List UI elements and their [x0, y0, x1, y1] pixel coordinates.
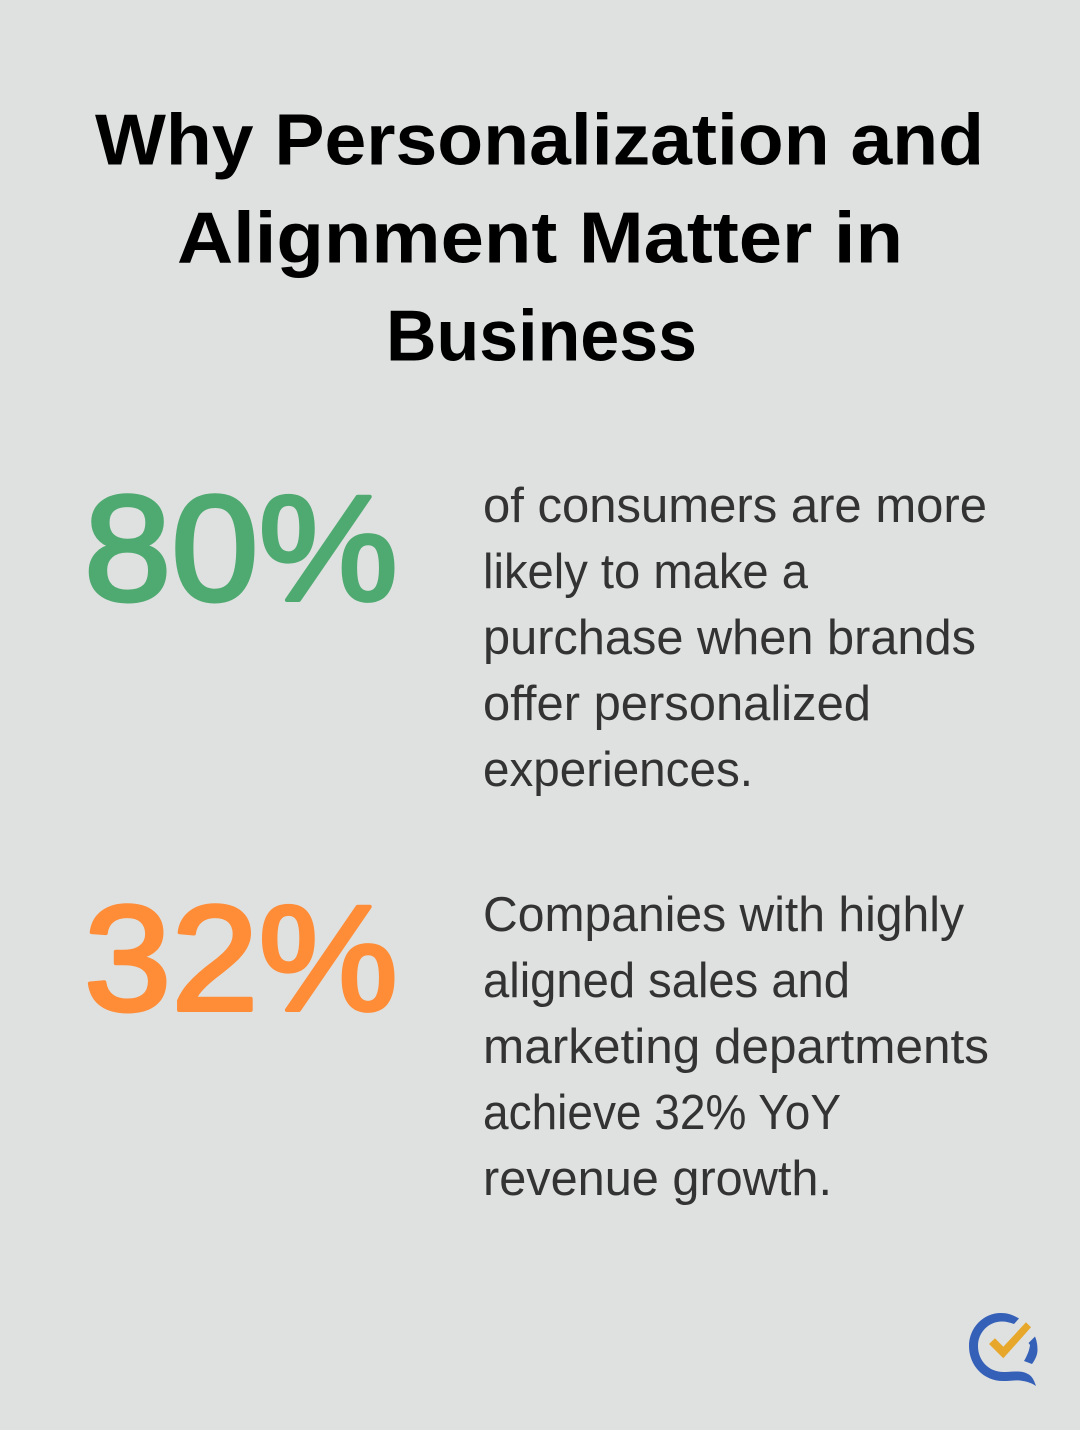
title: Business	[386, 296, 697, 376]
text block: personalization statistic description: offer personalized	[483, 677, 871, 731]
text block: alignment statistic description: achieve 32% YoY	[483, 1086, 841, 1140]
text block: personalization statistic description: purchase when brands	[483, 611, 976, 665]
text block: personalization statistic description: of consumers are more	[483, 479, 987, 533]
text block: personalization statistic description: experiences.	[483, 743, 753, 797]
text block: personalization statistic description	[483, 479, 987, 797]
title	[95, 100, 984, 376]
title: Why Personalization and	[95, 100, 984, 180]
statistic: 32%: 32%	[84, 874, 398, 1042]
title: Alignment Matter in	[177, 198, 903, 278]
icon: logo chat bubble with check mark	[969, 1313, 1038, 1386]
text block: alignment statistic description: Companies with highly	[483, 888, 964, 942]
text block: alignment statistic description: aligned sales and	[483, 954, 850, 1008]
text block: alignment statistic description	[483, 888, 989, 1206]
text block: alignment statistic description: marketing departments	[483, 1020, 989, 1074]
text block: alignment statistic description: revenue growth.	[483, 1152, 832, 1206]
statistic: 80%: 80%	[84, 464, 398, 632]
text block: personalization statistic description: likely to make a	[483, 545, 809, 599]
